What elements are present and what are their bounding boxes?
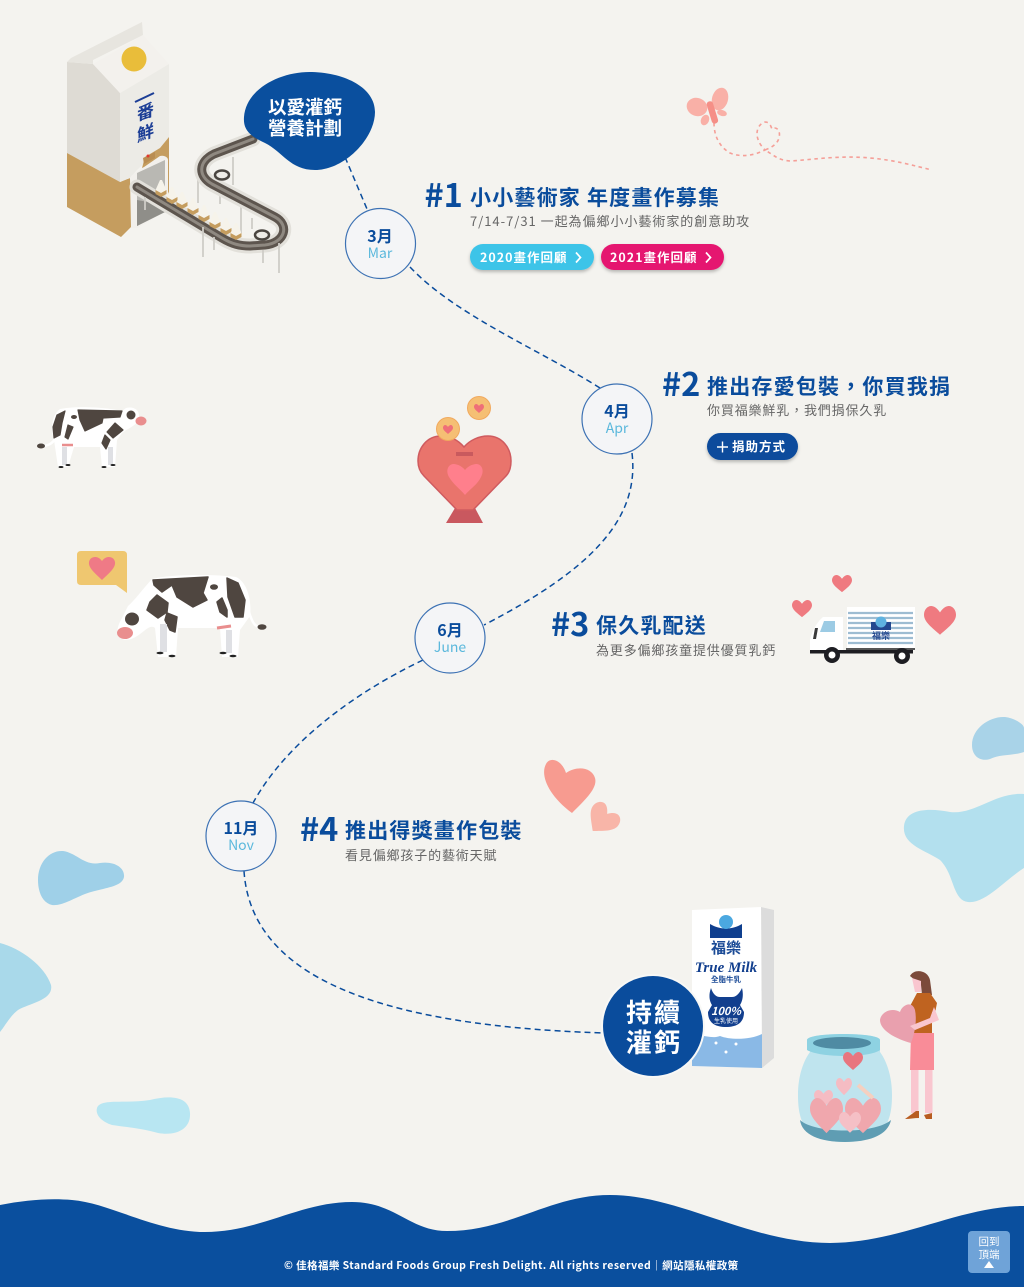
illustration: milk carton True Milk: 福樂 [711, 937, 741, 958]
step 3: June marker: June [434, 637, 466, 657]
button: 2021 review [601, 244, 724, 270]
step 3: heading [551, 599, 707, 646]
speech bubble: programme title [244, 72, 375, 170]
illustration: woman holding a heart [880, 971, 939, 1119]
step 1: March marker [346, 208, 416, 278]
conveyor belt [137, 139, 284, 246]
button: back to top [968, 1231, 1010, 1273]
illustration: milk carton factory and conveyor [67, 22, 284, 273]
button: back to top: 頂端 [978, 1247, 1000, 1262]
step 4: heading: #4 [300, 804, 338, 851]
blob: left edge [0, 943, 51, 1032]
carton label: 番 [137, 96, 154, 127]
carton right tan [142, 137, 169, 195]
footer: blue wave band [0, 1195, 1024, 1287]
step 2: heading: #2 [662, 359, 700, 406]
illustration: floating hearts [544, 760, 624, 841]
carton label rule [135, 93, 154, 102]
button: 2020 review: 2020畫作回顧 [480, 247, 568, 266]
illustration: delivery truck with hearts: 福樂 [872, 629, 890, 642]
badge: keep fortifying calcium: 持續 [626, 993, 682, 1030]
step 3: description: 為更多偏鄉孩童提供優質乳鈣 [596, 640, 776, 659]
step 2: April marker: Apr [606, 418, 629, 438]
button: how to donate: 捐助方式 [732, 436, 786, 455]
carton roof [93, 35, 169, 93]
carton door frame [131, 156, 168, 228]
carton door opening [137, 160, 165, 226]
carton label second char: 鮮 [137, 117, 154, 148]
step 3: heading: 保久乳配送 [596, 610, 707, 640]
illustration: delivery truck with hearts [792, 575, 956, 664]
step 2: heading [662, 359, 951, 406]
illustration: small cow [37, 407, 146, 468]
blob: left middle [38, 851, 124, 905]
step 4: November marker: Nov [228, 835, 255, 855]
step 1: description: 7/14-7/31 一起為偏鄉小小藝術家的創意助攻 [470, 211, 750, 230]
carton right wall [120, 64, 169, 182]
step 3: June marker [415, 603, 485, 673]
footer: copyright text: © 佳格福樂 Standard Foods Group Fresh Delight. All rights reserved｜網站隱私權政策 [284, 1258, 739, 1273]
badge: keep fortifying calcium: 灌鈣 [626, 1023, 682, 1060]
step 1: heading: #1 [424, 170, 463, 217]
step 4: November marker [206, 801, 276, 871]
bottles on the belt [156, 180, 242, 240]
carton roof back flap [67, 22, 143, 64]
carton cap [122, 46, 146, 72]
step 2: April marker: 4月 [604, 398, 630, 422]
step 4: November marker: 11月 [224, 815, 258, 839]
timeline dashed path [244, 157, 633, 1033]
step 1: heading [424, 170, 720, 217]
button: 2021 review: 2021畫作回顧 [610, 247, 698, 266]
step 2: heading: 推出存愛包裝，你買我捐 [707, 371, 951, 401]
step 4: heading [300, 804, 523, 851]
illustration: milk carton True Milk: 100% [711, 1003, 742, 1019]
step 3: heading: #3 [551, 599, 589, 646]
illustration: speech bubble with heart [77, 551, 127, 593]
step 1: March marker: Mar [368, 243, 393, 263]
blob: right large [904, 794, 1024, 902]
carton left wall [67, 62, 120, 182]
conveyor front legs [145, 197, 279, 273]
step 2: April marker [582, 384, 652, 454]
illustration: milk carton True Milk: 生乳使用 [714, 1016, 738, 1025]
badge: keep fortifying calcium [601, 974, 705, 1078]
illustration: milk carton True Milk: True Milk [695, 960, 758, 976]
illustration: jar of hearts [798, 1034, 892, 1142]
blob: upper right [972, 717, 1024, 760]
step 4: description: 看見偏鄉孩子的藝術天賦 [345, 845, 497, 864]
carton indicator [143, 152, 155, 164]
speech bubble: programme title: 以愛灌鈣 [268, 94, 342, 120]
button: back to top: 回到 [978, 1234, 1000, 1249]
speech bubble: programme title: 營養計劃 [268, 115, 342, 141]
conveyor rear legs [198, 157, 252, 233]
step 4: heading: 推出得獎畫作包裝 [345, 815, 523, 845]
illustration: milk carton True Milk [692, 907, 774, 1068]
button: 2020 review [470, 244, 594, 270]
step 1: March marker: 3月 [367, 223, 393, 247]
illustration: heart piggy bank with coins [418, 396, 511, 523]
illustration: milk carton True Milk: 全脂牛乳 [711, 974, 741, 985]
step 3: June marker: 6月 [437, 617, 463, 641]
button: how to donate [707, 433, 798, 460]
carton left tan base [67, 153, 131, 237]
step 1: heading: 小小藝術家 年度畫作募集 [470, 182, 720, 212]
blob: lower left [97, 1097, 190, 1134]
step 2: description: 你買福樂鮮乳，我們捐保久乳 [707, 400, 887, 419]
illustration: large grazing cow [117, 575, 266, 657]
icon: butterfly with dotted trail [684, 86, 932, 170]
